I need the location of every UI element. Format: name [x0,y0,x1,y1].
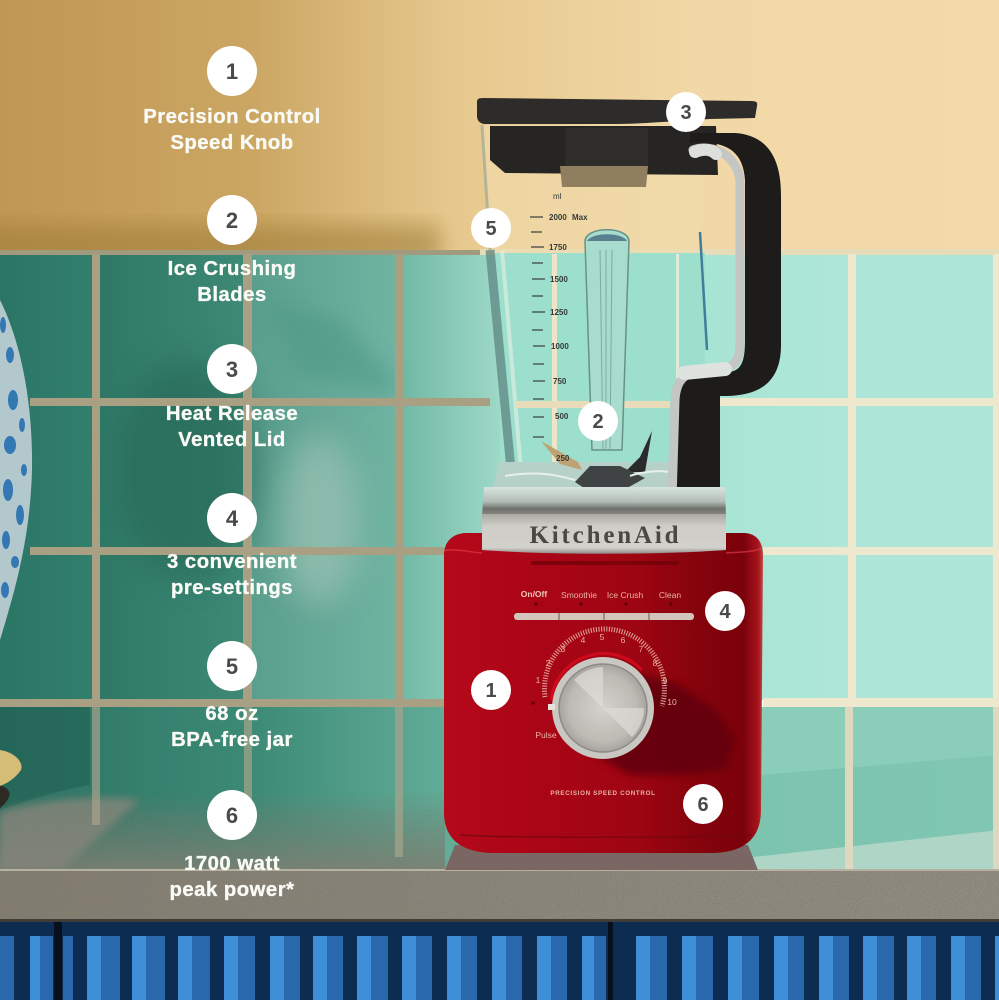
callout 4: 4 [719,601,731,623]
feature 2: Blades [197,284,267,306]
measurement scale: ml [553,192,562,201]
callout 1: 1 [485,680,497,702]
blender [444,98,781,870]
precision label: PRECISION SPEED CONTROL [550,790,656,797]
speed numbers: 5 [600,632,605,642]
speed numbers: 3 [561,644,566,654]
feature 1: Precision Control [143,106,321,128]
callout 5: 5 [485,218,497,240]
callout 6 [683,784,723,824]
measurement scale: 1500 [550,275,568,284]
metal collar with logo: KitchenAid [530,522,679,549]
decorative blue vase [0,300,32,640]
callout 6: 6 [697,794,709,816]
blue fluted cabinet [0,922,999,1000]
feature 2: 2 [226,208,238,233]
measurement scale: 250 [556,454,570,463]
jar base rim [482,487,726,516]
metal collar with logo [482,514,726,554]
speed numbers: 6 [621,635,626,645]
blender reflection and feet [445,845,758,870]
callout 3 [666,92,706,132]
decorative plate [0,750,22,808]
dial tick arc [544,629,664,706]
preset labels: On/Off [521,589,547,599]
measurement scale: 500 [555,412,569,421]
feature 1: Speed Knob [170,132,294,154]
background: kitchen wall [0,0,999,707]
knob [552,657,654,759]
speed numbers: 4 [581,635,586,645]
preset labels [521,589,681,600]
feature 3 [166,344,298,451]
blades [541,441,582,470]
callout 4 [705,591,745,631]
preset labels: Clean [659,590,681,600]
feature 2: Ice Crushing [168,258,296,280]
speed numbers: 9 [663,676,668,686]
callout 3: 3 [680,102,692,124]
measurement scale: 2000 [549,213,567,222]
callout 2: 2 [592,411,604,433]
feature 6: peak power* [170,879,294,901]
speed numbers: 10 [667,697,677,707]
speed numbers: 7 [639,644,644,654]
feature list [143,46,321,901]
feature 3: 3 [226,357,238,382]
callout 1 [471,670,511,710]
measurement scale: 1750 [549,243,567,252]
preset labels: Ice Crush [607,590,643,600]
preset labels: Smoothie [561,590,597,600]
measurement scale [530,192,588,463]
callout 2 [578,401,618,441]
countertop edge [0,869,999,922]
feature 5: BPA-free jar [171,729,293,751]
soft shadows and haze on the tiles [120,360,260,580]
callout 5 [471,208,511,248]
reflective countertop surface [0,707,999,870]
feature 6: 1700 watt [184,853,280,875]
knob shadow [580,670,735,775]
speed numbers: 8 [653,658,658,668]
measurement scale: 1000 [551,342,569,351]
measurement scale: Max [572,213,588,222]
feature 3: Heat Release [166,403,298,425]
speed numbers: 2 [546,658,551,668]
speed numbers: Pulse [535,730,557,740]
feature 5 [171,641,293,751]
feature 6: 6 [226,803,238,828]
feature 6 [170,790,294,901]
feature 5: 68 oz [205,703,259,725]
measurement scale: 750 [553,377,567,386]
feature 4: 4 [226,506,239,531]
feature 4: pre-settings [171,577,293,599]
lid [477,98,757,187]
jar floor [492,462,678,490]
handle silver insert [672,148,740,500]
control panel [514,589,694,797]
speed numbers: 1 [536,675,541,685]
feature 1 [143,46,321,154]
measurement scale: 1250 [550,308,568,317]
feature 3: Vented Lid [178,429,286,451]
jar body [482,125,707,492]
speed numbers [535,632,677,740]
feature 2 [168,195,296,306]
feature 5: 5 [226,654,238,679]
central blade column [585,230,629,450]
motor base [444,533,763,853]
feature 4 [167,493,297,599]
feature 4: 3 convenient [167,551,297,573]
handle [669,133,781,505]
preset bar [514,613,694,620]
tiles [0,255,92,700]
feature 1: 1 [226,59,238,84]
